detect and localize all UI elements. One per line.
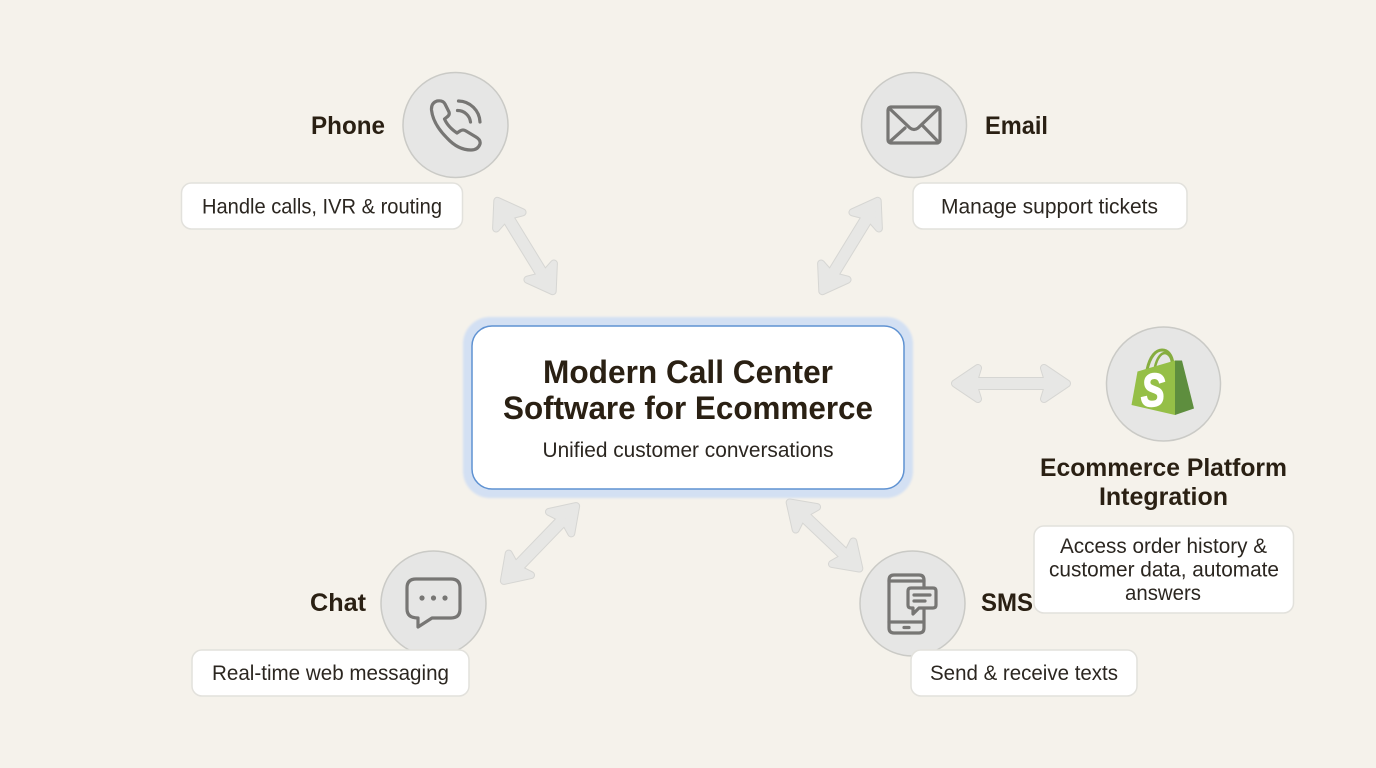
node: email <box>862 72 1187 229</box>
SMS description: Send & receive texts <box>930 662 1118 685</box>
email heading: Email <box>985 112 1048 140</box>
ecommerce description: Access order history & <box>1060 535 1267 558</box>
ecommerce description: customer data, automate <box>1049 558 1279 582</box>
arrow: email to center <box>809 193 891 299</box>
chat heading: Chat <box>310 589 367 617</box>
email description: Manage support tickets <box>941 196 1158 218</box>
arrow: SMS to center <box>779 491 870 580</box>
node: phone <box>182 72 508 229</box>
ecommerce heading <box>1040 454 1287 511</box>
title: Software for Ecommerce <box>503 390 873 426</box>
node: SMS <box>860 551 1137 696</box>
chat description: Real-time web messaging <box>212 662 449 685</box>
icon: shopify bag: S <box>1141 365 1165 416</box>
title <box>503 354 873 426</box>
arrow: ecommerce platform to center <box>955 368 1067 399</box>
arrow: chat to center <box>493 495 587 592</box>
email icon <box>862 72 966 178</box>
ecommerce description <box>1034 526 1294 613</box>
phone icon <box>403 72 508 178</box>
subtitle: Unified customer conversations <box>542 439 834 462</box>
email description <box>913 183 1187 229</box>
node: chat <box>192 551 486 696</box>
SMS description <box>911 650 1137 696</box>
node: ecommerce platform <box>1034 327 1294 613</box>
SMS icon <box>860 551 965 656</box>
phone description <box>182 183 462 229</box>
ecommerce heading: Ecommerce Platform <box>1040 454 1287 482</box>
arrow: phone to center <box>484 193 566 299</box>
ecommerce heading: Integration <box>1099 483 1228 511</box>
chat description <box>192 650 469 696</box>
phone heading: Phone <box>311 112 385 140</box>
title: Modern Call Center <box>543 354 833 390</box>
icon: shopify bag <box>1106 327 1220 441</box>
SMS heading: SMS <box>981 589 1033 617</box>
panel: central hub <box>463 317 913 498</box>
phone description: Handle calls, IVR & routing <box>202 196 442 218</box>
chat icon <box>381 551 486 656</box>
ecommerce description: answers <box>1125 582 1201 605</box>
